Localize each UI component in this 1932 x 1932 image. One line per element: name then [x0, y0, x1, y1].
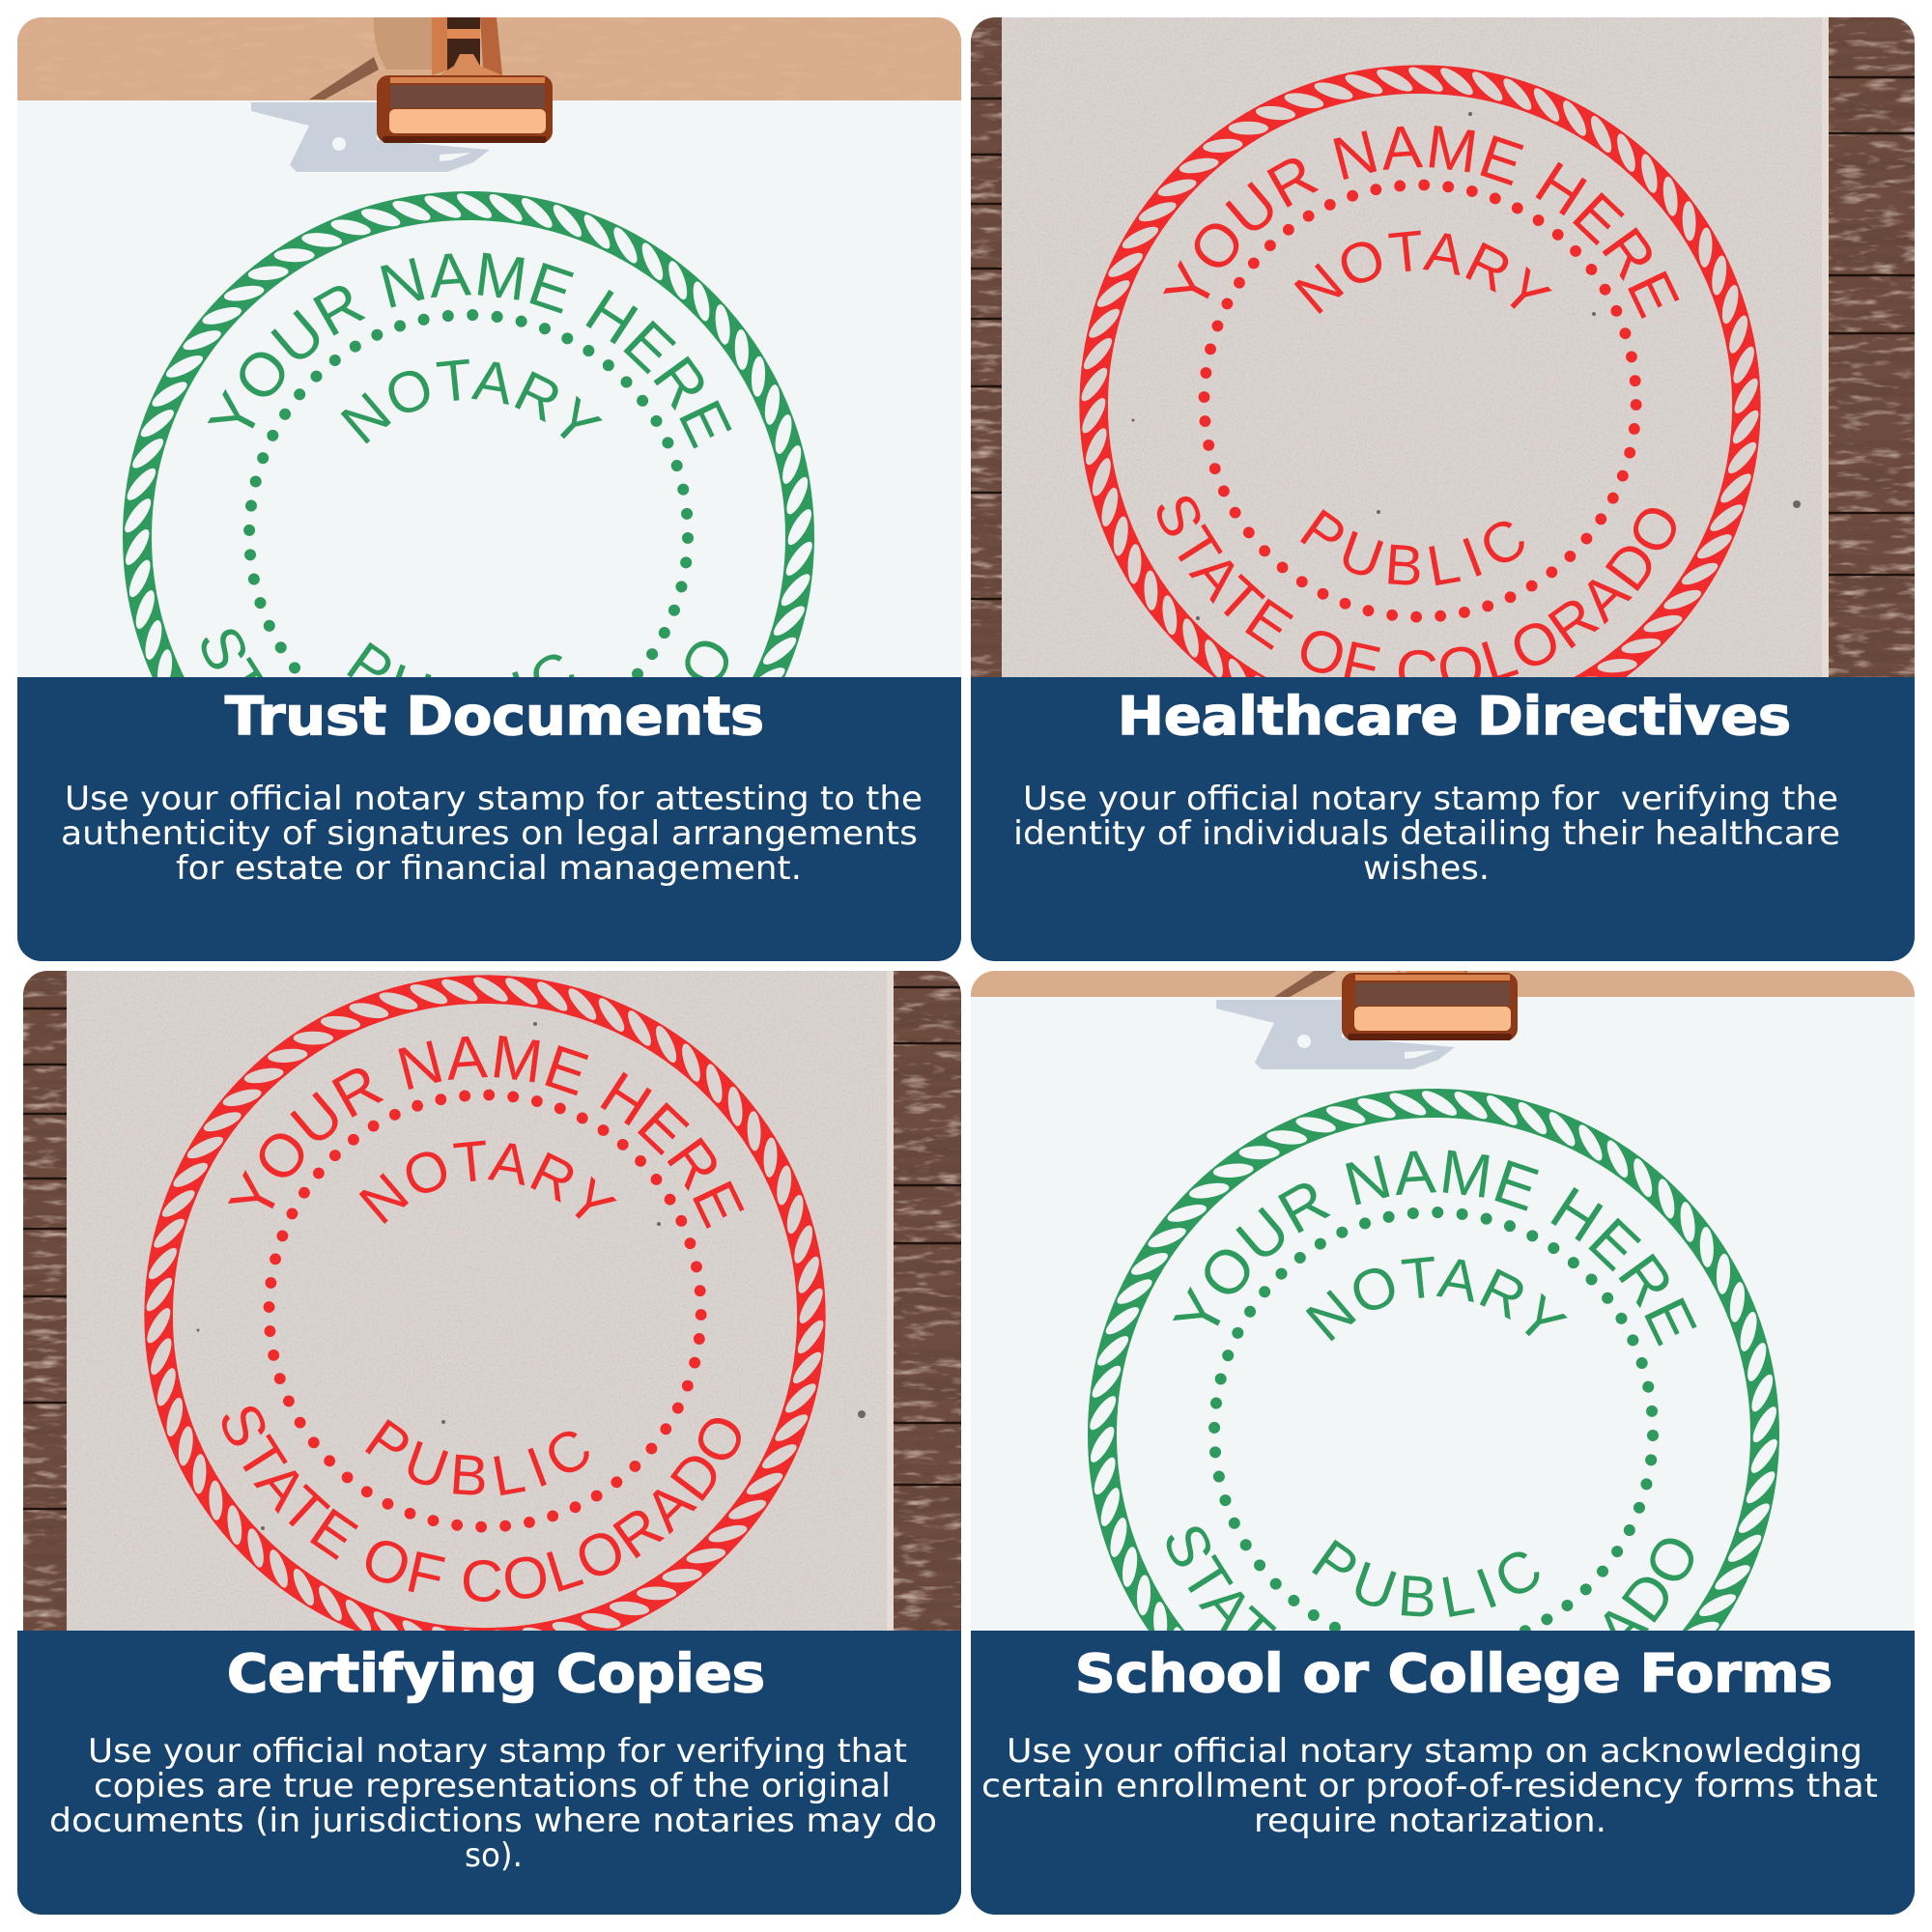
text block: Use your official notary stamp for verifying the [1023, 780, 1838, 818]
icon: copper binder clip [251, 17, 553, 172]
text block [49, 1732, 937, 1875]
stamp: green notary seal: YOUR NAME HERE [1173, 1150, 1696, 1347]
stamp: green notary seal: NOTARY [340, 359, 603, 444]
stamp: red notary seal: YOUR NAME HERE [228, 1036, 744, 1229]
text block: for estate or financial management. [176, 849, 802, 888]
stamp: red notary seal [144, 975, 826, 1631]
text block: Use your official notary stamp for verifying that [88, 1732, 907, 1771]
panel: Certifying Copies [17, 971, 961, 1915]
stamp: red notary seal: PUBLIC [365, 1419, 589, 1495]
stamp: red notary seal: STATE OF COLORADO [1157, 497, 1676, 677]
caption bar [971, 1631, 1915, 1915]
stamp: red notary seal: NOTARY [1294, 230, 1552, 314]
caption bar [17, 677, 961, 961]
stamp: red notary seal: STATE OF COLORADO [222, 1406, 741, 1602]
stamp: green notary seal: YOUR NAME HERE [207, 253, 732, 448]
text block [61, 780, 923, 888]
text block: Use your official notary stamp on acknowledging [1007, 1732, 1862, 1771]
text block: wishes. [1363, 849, 1490, 888]
stamp: green notary seal [1088, 1089, 1779, 1631]
panel: Trust Documents [17, 17, 961, 961]
stamp: green notary seal [123, 191, 814, 677]
photo: red stamp on grey card over dark wood [23, 971, 961, 1631]
photo: green stamp on white paper with clip [17, 17, 961, 677]
photo: green stamp on white paper with clip [971, 971, 1915, 1631]
stamp: red notary seal [1079, 65, 1761, 677]
text block [981, 1732, 1878, 1840]
stamp: green notary seal: PUBLIC [1312, 1540, 1540, 1617]
text block: copies are true representations of the original [94, 1767, 891, 1805]
stamp: green notary seal: NOTARY [1306, 1256, 1568, 1341]
text block: certain enrollment or proof-of-residency forms that [981, 1767, 1878, 1805]
text block: identity of individuals detailing their healthcare [1013, 814, 1840, 853]
heading: Certifying Copies [227, 1643, 765, 1704]
text block: documents (in jurisdictions where notaries may do [49, 1802, 937, 1840]
text block: so). [465, 1836, 523, 1875]
icon: copper binder clip [1216, 971, 1518, 1069]
text block: authenticity of signatures on legal arrangements [61, 814, 918, 853]
panel: Healthcare Directives [971, 17, 1915, 961]
text block: require notarization. [1254, 1802, 1606, 1840]
caption bar [971, 677, 1915, 961]
caption bar [17, 1631, 961, 1915]
heading: School or College Forms [1075, 1643, 1833, 1704]
text block [1013, 780, 1840, 888]
stamp: red notary seal: NOTARY [359, 1140, 617, 1224]
heading: Trust Documents [225, 686, 764, 747]
stamp: red notary seal: PUBLIC [1300, 509, 1524, 585]
text block: Use your official notary stamp for attesting to the [65, 780, 923, 818]
stamp: green notary seal: STATE OF COLORADO [1167, 1526, 1693, 1631]
stamp: green notary seal: STATE OF COLORADO [201, 629, 728, 677]
photo: red stamp on grey card over dark wood [971, 17, 1915, 677]
heading: Healthcare Directives [1118, 686, 1791, 747]
stamp: red notary seal: YOUR NAME HERE [1163, 126, 1679, 319]
stamp: green notary seal: PUBLIC [347, 641, 574, 677]
panel: School or College Forms [971, 971, 1915, 1915]
